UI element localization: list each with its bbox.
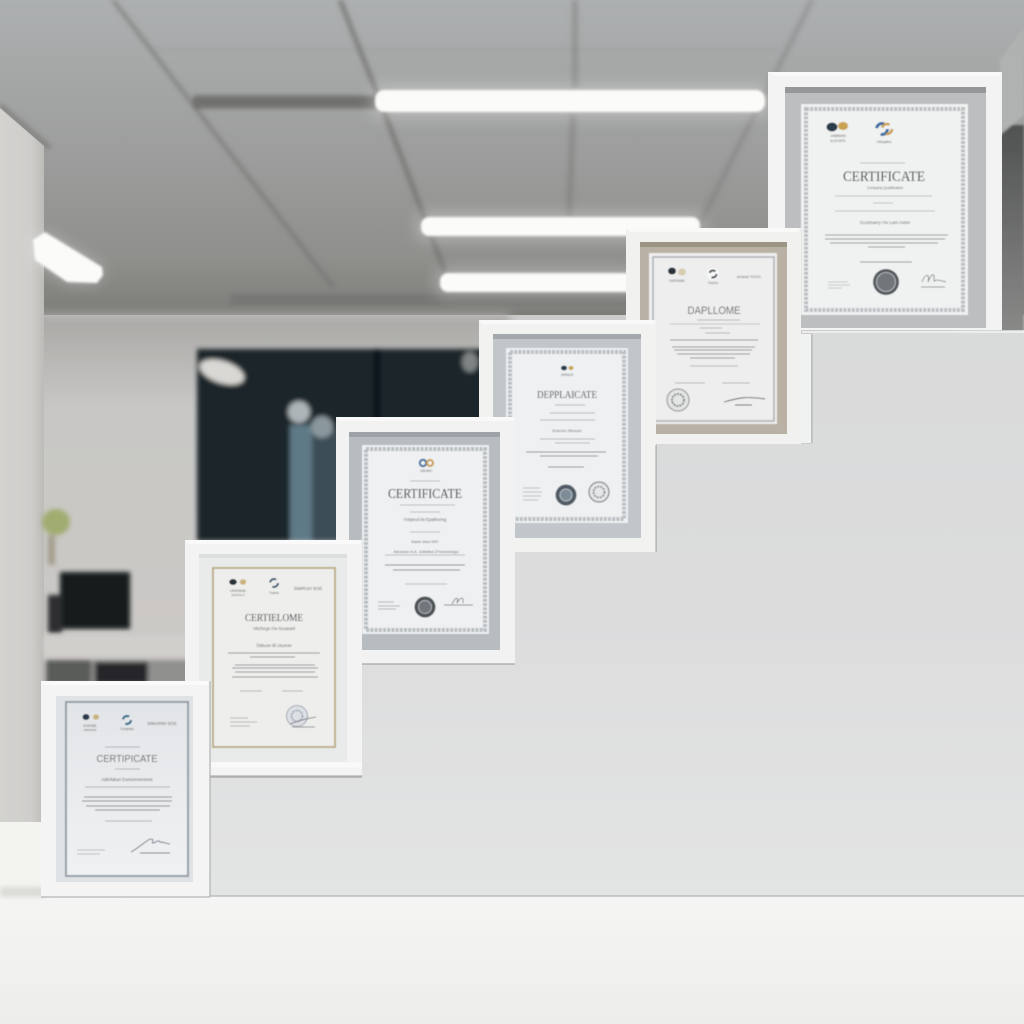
logos xyxy=(826,122,892,144)
logos: ENÖBE xyxy=(83,724,97,728)
certificate paper: Company Qualification xyxy=(867,186,903,190)
text lines xyxy=(540,405,595,443)
logos xyxy=(82,714,177,732)
diploma paper xyxy=(649,253,777,424)
logos: JABBAN xyxy=(830,133,846,138)
logos xyxy=(668,268,761,285)
seal xyxy=(667,389,689,411)
logo xyxy=(420,460,433,473)
frame 2: gold border document xyxy=(185,540,362,776)
logos: SIMARIN 5OE xyxy=(147,721,177,726)
seals xyxy=(556,484,576,506)
back wall xyxy=(30,314,510,834)
logo: UBUNO xyxy=(420,469,432,473)
ceiling lights xyxy=(33,86,768,296)
logos: ELEVATE xyxy=(830,139,846,143)
certificate paper xyxy=(801,104,968,315)
ornate paper: Ezerork Zibones xyxy=(552,428,582,433)
right background wall xyxy=(1000,28,1024,335)
frame 1: bottom certificate xyxy=(41,681,210,897)
logos: UKRANE xyxy=(669,279,685,283)
frame 6: top certificate xyxy=(768,72,1002,330)
signature xyxy=(724,398,765,405)
ceiling grid lines xyxy=(0,0,812,300)
certificate paper: Rame visne NST xyxy=(411,540,439,544)
certificate paper xyxy=(362,445,489,634)
frame 4: ornate certificate xyxy=(479,320,656,552)
certificate paper: Adérilakari Eursomneniums xyxy=(101,777,153,782)
text lines xyxy=(228,653,320,677)
logos: DIGITALS xyxy=(231,593,245,597)
logos xyxy=(229,579,322,597)
text lines xyxy=(385,481,465,584)
text lines xyxy=(85,747,170,821)
left column xyxy=(0,108,44,822)
frame 3: central certificate xyxy=(336,417,515,664)
white staircase block xyxy=(209,330,1024,896)
ornate paper xyxy=(506,348,628,523)
seal xyxy=(414,596,436,618)
logos: SIMRUH 5OE xyxy=(294,586,322,591)
heading: DAPLLOME xyxy=(688,305,740,317)
logos: sinaria TDOC xyxy=(737,274,761,279)
text lines xyxy=(835,163,935,211)
document paper xyxy=(213,568,335,747)
logos: Tuedro xyxy=(708,281,718,285)
logo xyxy=(561,366,573,377)
heading: CERTIFICATE xyxy=(388,487,462,502)
signature xyxy=(444,598,473,605)
desk with monitor and plant xyxy=(42,509,194,684)
logos: Tuanio xyxy=(269,591,279,595)
certificate paper: Hotpeod its Epathuring xyxy=(404,517,447,522)
mat xyxy=(785,87,986,328)
heading: CERTIELOME xyxy=(245,612,303,624)
frame 5: diploma with tan mat xyxy=(626,228,801,444)
heading: CERTIFICATE xyxy=(843,169,925,185)
signature xyxy=(131,839,170,853)
certificate paper: Guzetuery Hu Lam Aeter xyxy=(860,220,911,225)
white table xyxy=(0,896,1024,1024)
heading: DEPPLAICATE xyxy=(537,389,597,401)
signature xyxy=(921,275,946,287)
logo: UKRAJS xyxy=(561,373,573,377)
logos: Ubayfes xyxy=(877,139,891,144)
certificate paper: Aduoson A.A. Juliddea ZTundoneIgo xyxy=(393,549,459,554)
seal xyxy=(286,706,308,726)
logos: ARRAWS xyxy=(83,728,97,732)
dark window xyxy=(197,349,497,541)
logos: UKRAINE xyxy=(230,589,247,593)
seal xyxy=(873,269,899,295)
text lines xyxy=(675,320,750,383)
document paper: Ösbuon iiš Usumer xyxy=(256,643,292,648)
heading: CERTIPICATE xyxy=(96,753,158,765)
document paper: Vitchzgs t'ia Nuassel xyxy=(253,626,295,631)
certificate paper xyxy=(66,702,188,876)
ceiling xyxy=(0,0,1024,315)
logos: Compass xyxy=(120,727,134,731)
